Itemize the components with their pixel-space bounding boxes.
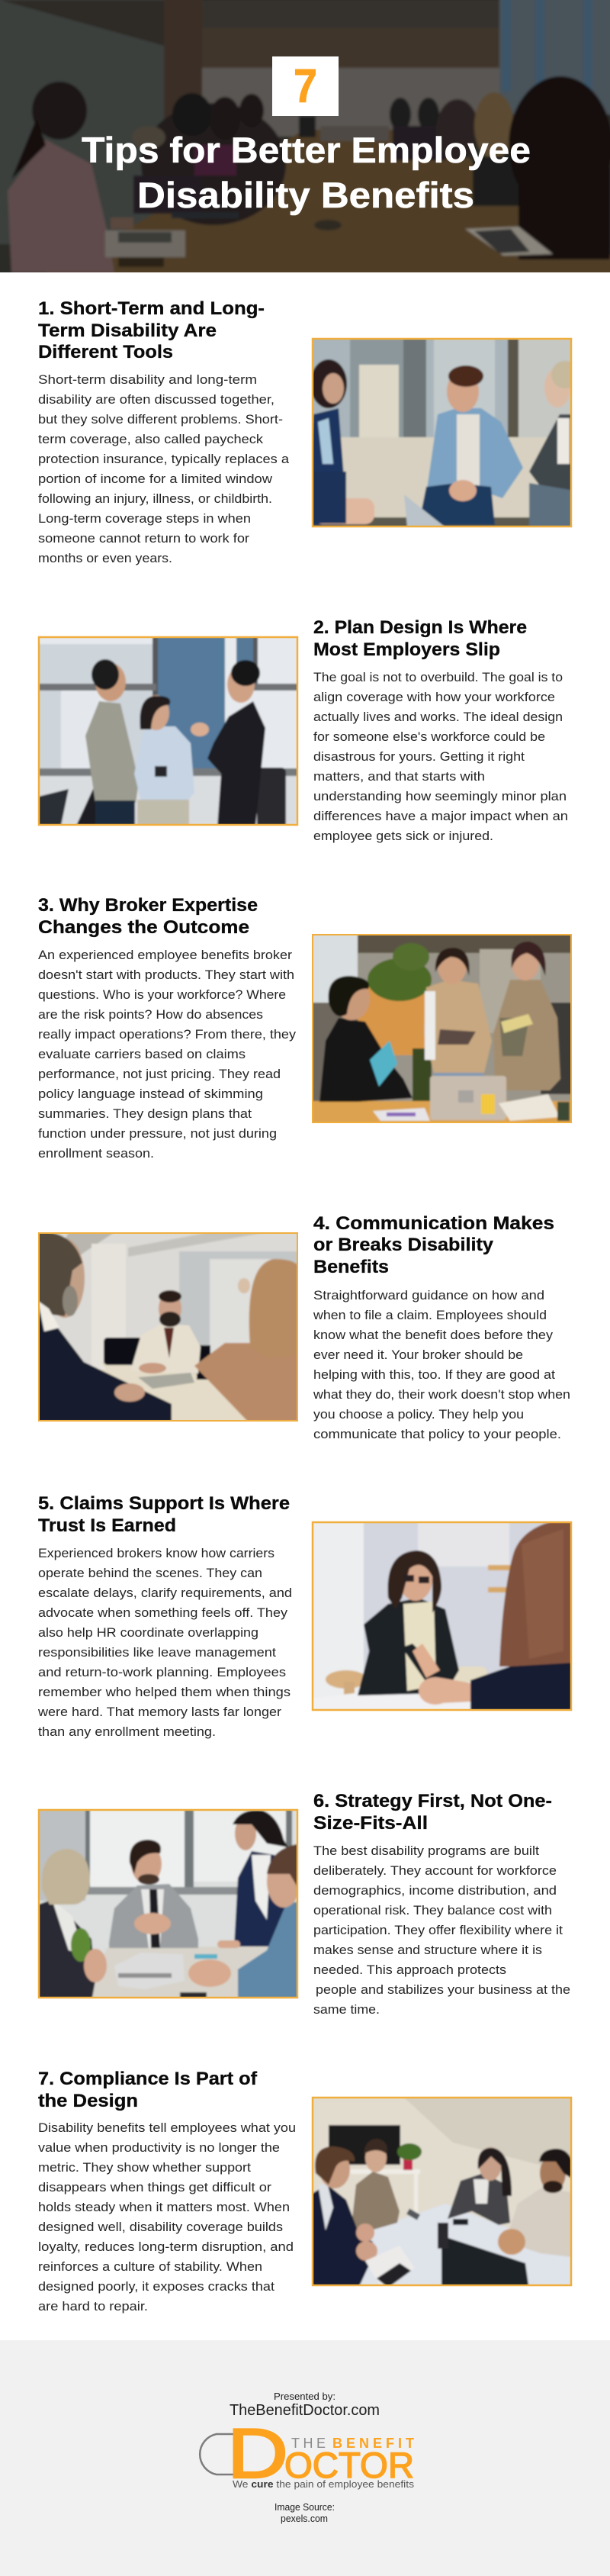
photo: interview at a conference table	[34, 1228, 302, 1425]
logo: The Benefit Doctor: OCTOR	[284, 2445, 414, 2485]
body text: protection insurance, typically replaces a	[38, 452, 290, 466]
body text: The best disability programs are built	[313, 1843, 539, 1858]
photo: team meeting around a conference phone	[34, 1805, 302, 2002]
body text: when to file a claim. Employees should	[313, 1308, 547, 1322]
body text: disability are often discussed together,	[38, 392, 274, 407]
body text: policy language instead of skimming	[38, 1087, 263, 1101]
body text: someone cannot return to work for	[38, 531, 249, 546]
body text: makes sense and structure where it is	[313, 1943, 542, 1957]
body text: remember who helped them when things	[38, 1685, 291, 1699]
heading: 3. Why Broker Expertise	[38, 895, 258, 916]
body text	[313, 1288, 570, 1441]
heading	[38, 1493, 290, 1536]
panel: tip 4	[34, 1213, 570, 1441]
hero banner	[0, 0, 610, 282]
body text: Straightforward guidance on how and	[313, 1288, 544, 1302]
body text	[38, 2120, 296, 2314]
heading: 5. Claims Support Is Where	[38, 1493, 290, 1514]
panel: tip 6	[34, 1791, 570, 2017]
body text: months or even years.	[38, 551, 172, 565]
body text	[37, 1546, 292, 1739]
body text: also help HR coordinate overlapping	[38, 1625, 258, 1640]
photo: three colleagues on a sofa	[308, 334, 579, 533]
body text: for someone else's workforce could be	[313, 729, 545, 744]
body text: doesn't start with products. They start with	[38, 968, 294, 982]
body text: understanding how seemingly minor plan	[313, 789, 567, 803]
body text: designed poorly, it exposes cracks that	[38, 2279, 274, 2294]
heading	[38, 2069, 258, 2111]
body text: helping with this, too. If they are good at	[313, 1367, 555, 1382]
body text: The goal is not to overbuild. The goal is to	[313, 670, 563, 684]
logo: The Benefit Doctor: BENEFIT	[332, 2436, 414, 2451]
body text	[38, 948, 297, 1161]
image source credit: pexels.com	[281, 2513, 328, 2524]
body text: enrollment season.	[38, 1146, 154, 1161]
body text: than any enrollment meeting.	[38, 1724, 216, 1739]
heading: 1. Short-Term and Long-	[38, 298, 265, 319]
body text: actually lives and works. The ideal design	[313, 710, 563, 724]
heading: or Breaks Disability	[313, 1235, 494, 1255]
body text	[38, 372, 290, 565]
body text: and return-to-work planning. Employees	[38, 1665, 286, 1679]
image source credit: Image Source:	[274, 2502, 335, 2513]
body text: portion of income for a limited window	[38, 472, 273, 486]
body text: you choose a policy. They help you	[313, 1407, 524, 1422]
heading: Term Disability Are	[38, 320, 217, 341]
body text: holds steady when it matters most. When	[38, 2200, 290, 2214]
number badge	[272, 56, 339, 116]
heading	[313, 1213, 554, 1277]
body text: reinforces a culture of stability. When	[38, 2259, 262, 2274]
body text: questions. Who is your workforce? Where	[38, 987, 286, 1002]
logo: The Benefit Doctor: We cure the pain of employee benefits	[233, 2478, 415, 2490]
body text: know what the benefit does before they	[313, 1328, 554, 1342]
heading: Size-Fits-All	[313, 1813, 428, 1834]
heading	[313, 1791, 552, 1834]
body text: term coverage, also called paycheck	[38, 432, 264, 446]
body text: ever need it. Your broker should be	[313, 1348, 523, 1362]
logo: The Benefit Doctor: D	[227, 2415, 288, 2493]
presented by text: TheBenefitDoctor.com	[230, 2402, 380, 2419]
heading: the Design	[38, 2091, 138, 2111]
body text: needed. This approach protects	[313, 1963, 506, 1977]
heading: 7. Compliance Is Part of	[38, 2069, 258, 2089]
logo: The Benefit Doctor	[200, 2415, 415, 2493]
photo: three colleagues by a window	[34, 633, 302, 829]
heading: Different Tools	[38, 342, 173, 362]
body text: Experienced brokers know how carriers	[38, 1546, 274, 1560]
body text: employee gets sick or injured.	[313, 829, 493, 843]
photo: handshake across a desk	[308, 1518, 576, 1715]
body text: deliberately. They account for workforce	[313, 1863, 557, 1878]
panel: tip 2	[34, 617, 568, 843]
body text: same time.	[313, 2002, 380, 2017]
title: Tips for Better Employee	[82, 130, 531, 170]
body text: loyalty, reduces long-term disruption, and	[38, 2240, 294, 2254]
body text: summaries. They design plans that	[38, 1106, 252, 1121]
heading: Benefits	[313, 1257, 389, 1277]
body text: but they solve different problems. Short-	[38, 412, 283, 427]
heading: 2. Plan Design Is Where	[313, 617, 527, 638]
body text: disastrous for yours. Getting it right	[313, 749, 525, 764]
body text: following an injury, illness, or childbirth.	[38, 491, 272, 506]
panel: tip 1	[38, 298, 579, 565]
body text: align coverage with how your workforce	[313, 690, 555, 704]
body text: people and stabilizes your business at the	[316, 1982, 570, 1997]
body text: performance, not just pricing. They read	[38, 1067, 281, 1081]
panel: tip 3	[38, 895, 576, 1161]
body text: participation. They offer flexibility where it	[313, 1923, 563, 1937]
title: Disability Benefits	[137, 175, 474, 215]
body text: communicate that policy to your people.	[313, 1427, 561, 1441]
heading: 4. Communication Makes	[313, 1213, 554, 1234]
body text: escalate delays, clarify requirements, and	[38, 1586, 292, 1600]
body text: Disability benefits tell employees what you	[38, 2120, 296, 2135]
presented by text: Presented by:	[274, 2391, 336, 2402]
panel: tip 5	[37, 1493, 576, 1739]
heading	[313, 617, 527, 660]
body text: were hard. That memory lasts far longer	[37, 1705, 281, 1719]
body text: differences have a major impact when an	[313, 809, 568, 823]
photo: office team around a desk	[308, 930, 576, 1128]
body text: value when productivity is no longer the	[38, 2140, 280, 2155]
body text: An experienced employee benefits broker	[38, 948, 292, 962]
title	[82, 130, 531, 215]
presented by text	[230, 2391, 380, 2419]
photo: four colleagues at a white table	[308, 2093, 576, 2290]
heading	[38, 298, 265, 362]
body text: responsibilities like leave management	[38, 1645, 276, 1660]
panel: footer	[0, 2340, 610, 2576]
body text	[313, 1843, 570, 2017]
heading: 6. Strategy First, Not One-	[313, 1791, 552, 1811]
body text: matters, and that starts with	[313, 769, 485, 784]
body text: what they do, their work doesn't stop when	[313, 1387, 570, 1402]
body text: really impact operations? From there, they	[38, 1027, 297, 1042]
heading	[38, 895, 258, 938]
body text	[313, 670, 568, 843]
body text: advocate when something feels off. They	[38, 1605, 288, 1620]
body text: metric. They show whether support	[38, 2160, 251, 2175]
heading: Changes the Outcome	[38, 917, 249, 938]
body text: operational risk. They balance cost with	[313, 1903, 552, 1918]
heading: Most Employers Slip	[313, 639, 500, 660]
body text: disappears when things get difficult or	[38, 2180, 271, 2194]
hero photo: dark meeting room	[0, 0, 610, 272]
body text: are hard to repair.	[38, 2299, 148, 2314]
body text: function under pressure, not just during	[38, 1126, 277, 1141]
panel: tip 7	[38, 2069, 576, 2314]
body text: evaluate carriers based on claims	[38, 1047, 246, 1061]
body text: operate behind the scenes. They can	[38, 1566, 262, 1580]
heading: Trust Is Earned	[38, 1515, 176, 1536]
body text: Short-term disability and long-term	[38, 372, 257, 387]
body text: designed well, disability coverage builds	[38, 2220, 283, 2234]
number badge: 7	[294, 60, 317, 113]
image source credit	[274, 2502, 335, 2524]
logo: The Benefit Doctor: THE	[291, 2436, 326, 2451]
body text: demographics, income distribution, and	[313, 1883, 557, 1898]
body text: are the risk points? How do absences	[38, 1007, 263, 1022]
body text: Long-term coverage steps in when	[38, 511, 251, 526]
